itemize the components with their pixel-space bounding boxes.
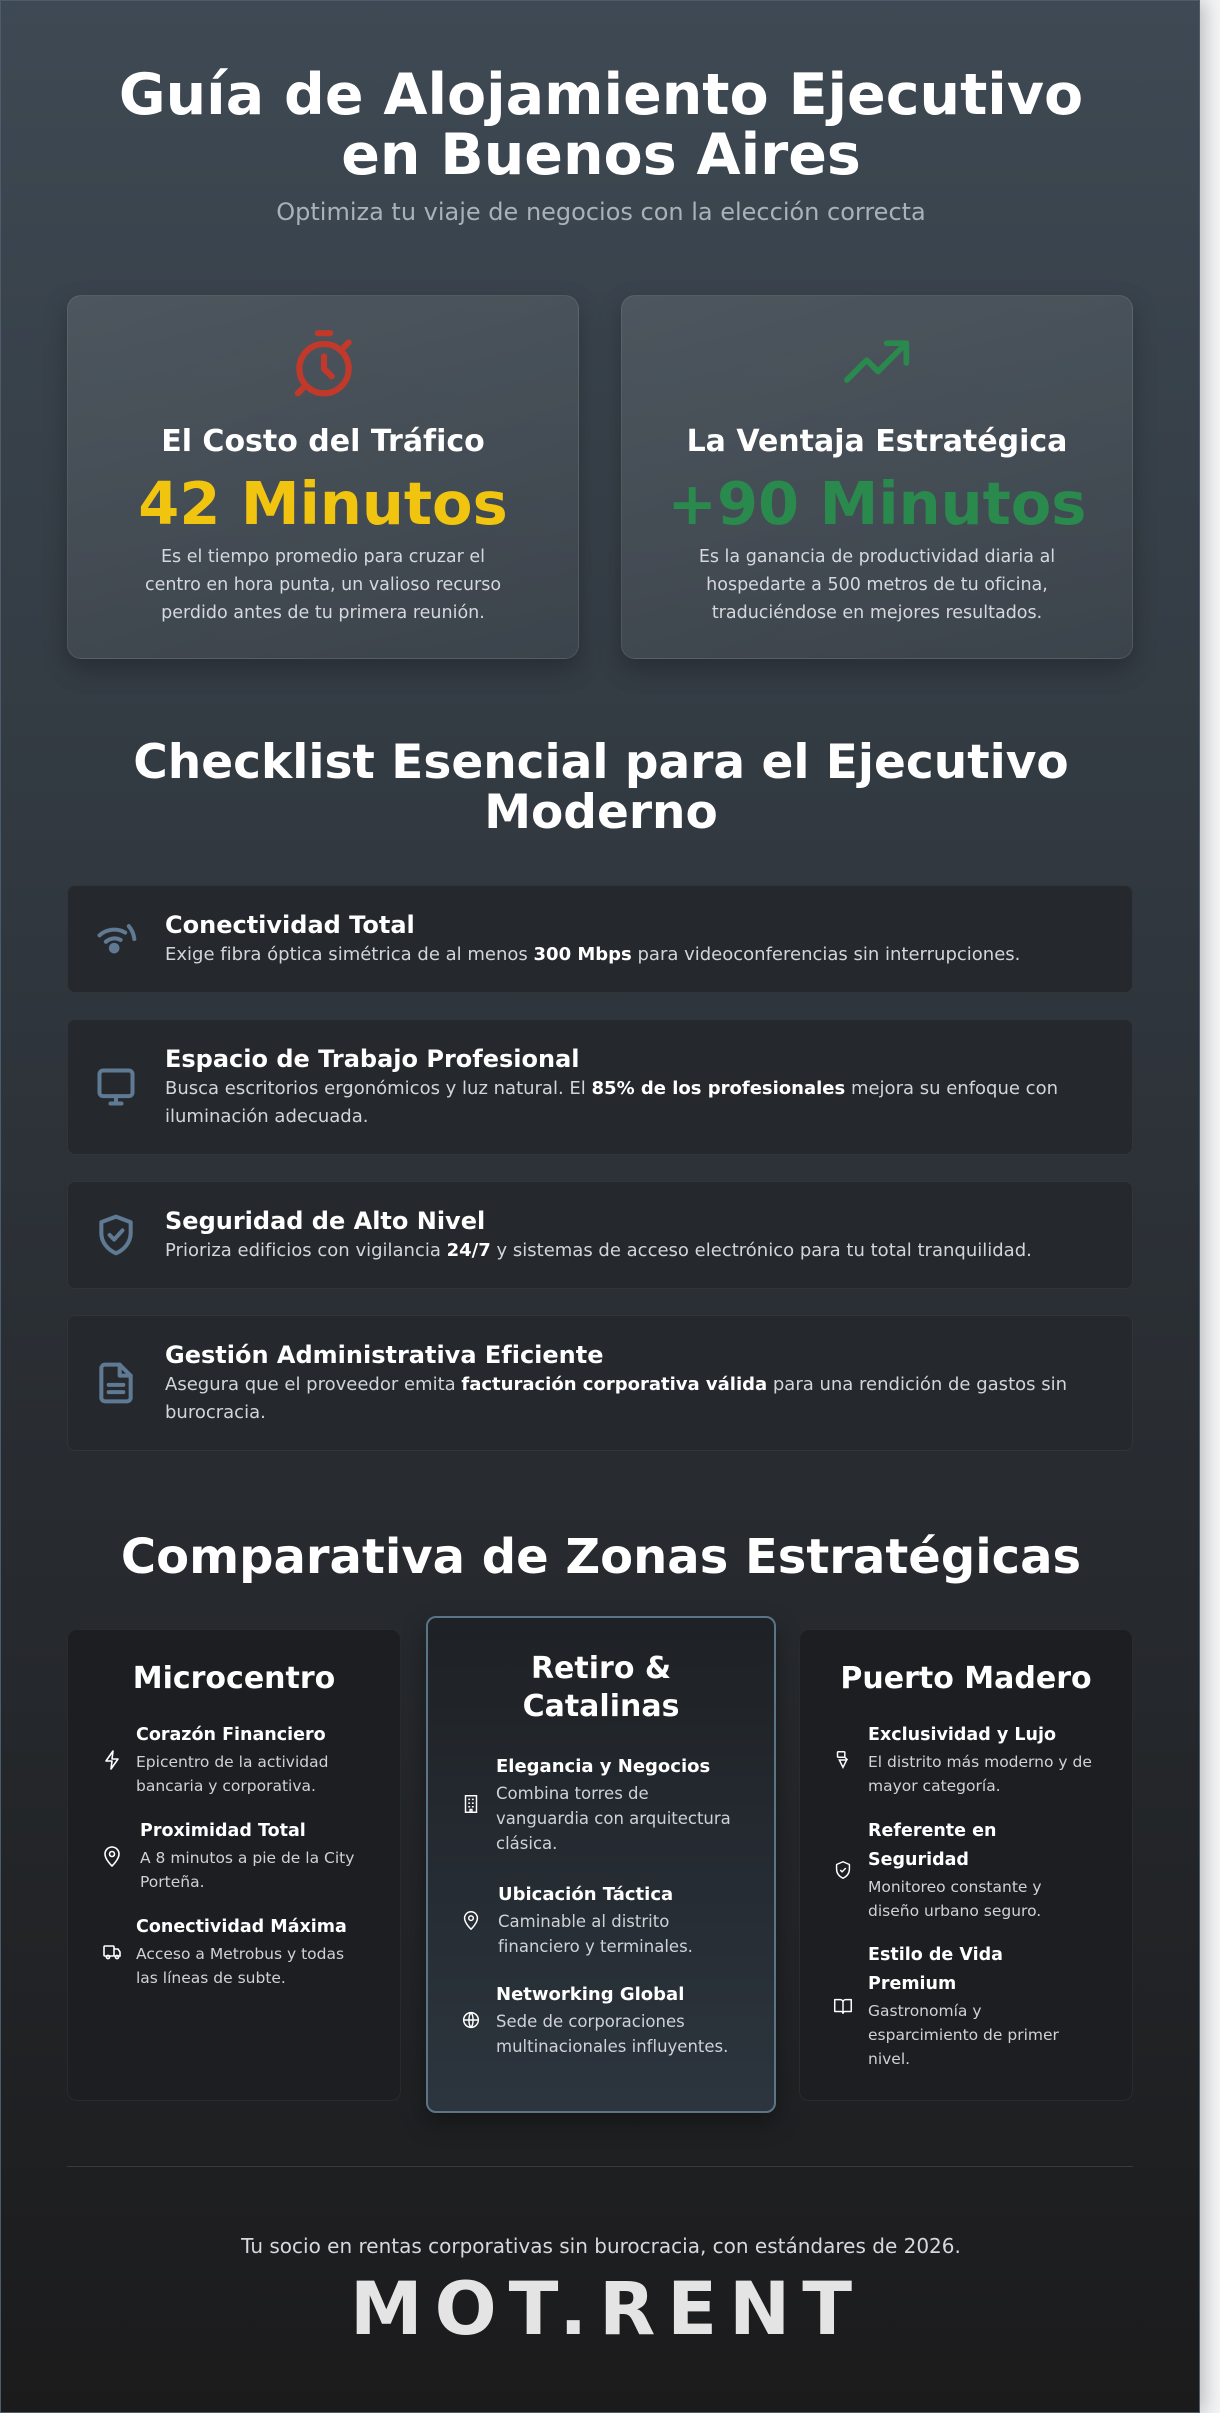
item: networking global: Networking Global [496,1984,684,2005]
footer tagline: Tu socio en rentas corporativas sin burocracia, con estándares de 2026. [241,2234,961,2258]
item: conectividad máxima: Conectividad Máxima [136,1917,347,1937]
item: estilo de vida premium: Estilo de Vida Premium [868,1945,1003,1994]
item: estilo de vida premium [834,1945,1059,2068]
panel: puerto madero [799,1629,1133,2101]
item: corazón financiero [105,1725,328,1795]
item: ubicación táctica: Ubicación Táctica [498,1884,673,1905]
item: corazón financiero: Corazón Financiero [136,1725,326,1745]
panel: ventaja estratégica [621,295,1133,659]
panel: retiro & catalinas (highlighted) [426,1616,776,2113]
item: proximidad total: A 8 minutos a pie de la City Porteña. [140,1849,354,1891]
panel: ventaja estratégica: La Ventaja Estratégica [687,424,1067,459]
checklist item: seguridad: Seguridad de Alto Nivel [165,1207,485,1235]
footer logo: MOT.RENT [350,2267,864,2352]
icon: wifi [97,924,136,954]
title [119,62,1083,188]
panel: microcentro: Microcentro [133,1661,335,1696]
item: proximidad total: Proximidad Total [140,1821,306,1841]
title: Guía de Alojamiento Ejecutivo [119,62,1083,128]
item: ubicación táctica: Caminable al distrito financiero y terminales. [498,1912,693,1956]
panel: costo del tráfico: El Costo del Tráfico [161,424,485,459]
item: proximidad total [104,1821,354,1891]
title: en Buenos Aires [341,122,861,188]
panel: ventaja estratégica: Es la ganancia de productividad diaria al hospedarte a 500 metros de tu oficina, traduciéndose en mejores resultados. [699,547,1055,623]
icon: trending up [844,340,910,383]
checklist item: seguridad [67,1181,1133,1289]
checklist item: gestión administrativa: Gestión Administrativa Eficiente [165,1341,604,1369]
item: exclusividad y lujo: El distrito más moderno y de mayor categoría. [868,1753,1092,1795]
checklist item: gestión administrativa [67,1315,1133,1451]
item: ubicación táctica [464,1884,693,1956]
item: referente en seguridad: Monitoreo constante y diseño urbano seguro. [868,1878,1042,1920]
panel: puerto madero: Puerto Madero [840,1661,1092,1696]
panel: retiro & catalinas (highlighted): Retiro & [531,1651,671,1686]
item: elegancia y negocios: Elegancia y Negocios [496,1756,710,1777]
checklist item: seguridad: Prioriza edificios con vigilancia 24/7 y sistemas de acceso electrónico para tu total tranquilidad. [165,1240,1032,1261]
checklist item: conectividad: Conectividad Total [165,911,415,939]
item: elegancia y negocios [464,1756,731,1853]
checklist item: gestión administrativa: Asegura que el proveedor emita facturación corporativa válida para una rendición de gastos sin burocracia. [165,1374,1067,1423]
item: networking global [462,1984,728,2056]
checklist item: espacio de trabajo: Espacio de Trabajo Profesional [165,1045,580,1073]
subtitle: Optimiza tu viaje de negocios con la elección correcta [276,198,926,226]
icon: document [99,1362,133,1404]
heading: checklist: Moderno [484,785,718,840]
heading: comparativa: Comparativa de Zonas Estratégicas [121,1529,1081,1585]
panel: microcentro [67,1629,401,2101]
panel: retiro & catalinas (highlighted): Catalinas [523,1689,679,1724]
heading: checklist: Checklist Esencial para el Ejecutivo [133,735,1069,790]
item: referente en seguridad: Referente en Seguridad [868,1821,996,1870]
checklist item: conectividad: Exige fibra óptica simétrica de al menos 300 Mbps para videoconferencias sin interrupciones. [165,944,1020,965]
icon: stopwatch [294,330,352,396]
checklist item: espacio de trabajo [67,1019,1133,1155]
icon: shield [99,1214,133,1256]
panel: ventaja estratégica: +90 Minutos [668,469,1086,538]
item: conectividad máxima [103,1917,347,1987]
item: referente en seguridad [836,1821,1042,1920]
panel: costo del tráfico: Es el tiempo promedio para cruzar el centro en hora punta, un valioso recurso perdido antes de tu primera reunión. [145,547,501,623]
item: exclusividad y lujo: Exclusividad y Lujo [868,1725,1056,1745]
heading: checklist [133,735,1069,840]
panel: costo del tráfico [67,295,579,659]
item: corazón financiero: Epicentro de la actividad bancaria y corporativa. [136,1753,328,1795]
item: networking global: Sede de corporaciones multinacionales influyentes. [496,2012,728,2056]
icon: monitor [98,1068,134,1106]
checklist item: espacio de trabajo: Busca escritorios ergonómicos y luz natural. El 85% de los profesionales mejora su enfoque con iluminación adecuada. [165,1078,1058,1127]
item: conectividad máxima: Acceso a Metrobus y todas las líneas de subte. [136,1945,344,1987]
item: estilo de vida premium: Gastronomía y esparcimiento de primer nivel. [868,2002,1059,2068]
item: exclusividad y lujo [836,1725,1092,1795]
item: elegancia y negocios: Combina torres de vanguardia con arquitectura clásica. [496,1784,731,1853]
panel: costo del tráfico: 42 Minutos [138,469,508,538]
checklist item: conectividad [67,885,1133,993]
